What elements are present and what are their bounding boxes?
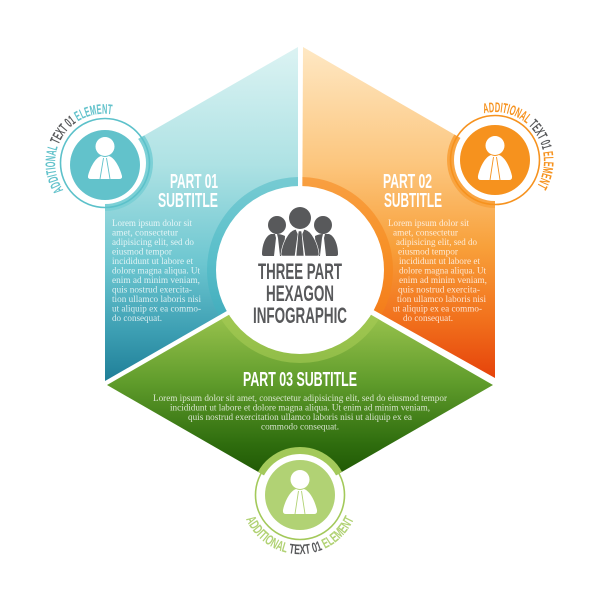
- text block: part 02 body: Lorem ipsum dolor sit: [388, 218, 469, 228]
- title: INFOGRAPHIC: [253, 303, 347, 328]
- text block: part 02 body: amet, consectetur: [393, 228, 458, 238]
- icon: three people: [262, 207, 338, 256]
- text block: part 03 body: [153, 393, 447, 432]
- text block: part 02 body: ut aliquip ex ea commo-: [393, 304, 482, 314]
- panel: part 01 blue: [105, 47, 298, 381]
- title: HEXAGON: [266, 281, 334, 306]
- badge: part 02 icon: [450, 102, 554, 206]
- text block: part 03 body: Lorem ipsum dolor sit amet, consectetur adipisicing elit, sed do eiusmod tempor: [153, 393, 447, 403]
- curved label: ADDITIONAL TEXT 01 ELEMENT: [45, 104, 113, 194]
- text block: part 01 body: incididunt ut labore et: [112, 256, 194, 266]
- text block: part 03 body: commodo consequat.: [261, 422, 339, 432]
- text block: part 02 body: do consequat.: [403, 313, 453, 323]
- heading: part 01: SUBTITLE: [158, 190, 218, 212]
- badge: part 01 icon: [45, 104, 150, 208]
- text block: part 02 body: incididunt ut labore et: [399, 256, 481, 266]
- text block: part 02 body: enim ad minim veniam,: [399, 275, 487, 285]
- text block: part 02 body: quis nostrud exercita-: [398, 284, 480, 294]
- heading: part 03: PART 03 SUBTITLE: [243, 369, 357, 391]
- text block: part 01 body: eiusmod tempor: [112, 246, 172, 256]
- text block: part 01 body: ut aliquip ex ea commo-: [112, 304, 201, 314]
- text block: part 01 body: enim ad minim veniam,: [112, 275, 200, 285]
- text block: part 01 body: tion ullamco laboris nisi: [112, 294, 201, 304]
- heading: part 02: SUBTITLE: [384, 190, 442, 212]
- panel: part 03 green: [107, 314, 493, 476]
- text block: part 01 body: amet, consectetur: [112, 228, 178, 238]
- title: [253, 259, 347, 328]
- curved label: ADDITIONAL TEXT 01 ELEMENT: [484, 102, 554, 191]
- text block: part 02 body: adipisicing elit, sed do: [396, 237, 477, 247]
- heading: part 02: [383, 171, 442, 212]
- icon: person: [478, 136, 512, 180]
- heading: part 02: PART 02: [383, 171, 432, 193]
- text block: part 03 body: quis nostrud exercitation ullamco laboris nisi ut aliquip ex ea: [188, 412, 412, 422]
- text block: part 01 body: do consequat.: [112, 313, 162, 323]
- title: THREE PART: [258, 259, 342, 284]
- text block: part 03 body: incididunt ut labore et dolore magna aliqua. Ut enim ad minim veniam,: [170, 402, 430, 412]
- text block: part 01 body: [112, 218, 201, 323]
- text block: part 01 body: Lorem ipsum dolor sit: [112, 218, 192, 228]
- curved label: ADDITIONAL TEXT 01 ELEMENT: [246, 515, 353, 554]
- text block: part 02 body: dolore magna aliqua. Ut: [399, 266, 486, 276]
- heading: part 01: [158, 171, 218, 212]
- badge: part 03 icon: [246, 454, 353, 554]
- icon: person: [88, 137, 122, 179]
- text block: part 02 body: tion ullamco laboris nisi: [397, 294, 486, 304]
- center circle: [216, 186, 384, 354]
- text block: part 02 body: eiusmod tempor: [398, 246, 458, 256]
- text block: part 01 body: dolore magna aliqua. Ut: [112, 266, 200, 276]
- icon: person: [283, 470, 317, 514]
- heading: part 01: PART 01: [170, 171, 218, 193]
- text block: part 01 body: quis nostrud exercita-: [112, 284, 192, 294]
- panel: part 02 orange: [302, 47, 495, 378]
- text block: part 02 body: [388, 218, 487, 323]
- text block: part 01 body: adipisicing elit, sed do: [112, 237, 194, 247]
